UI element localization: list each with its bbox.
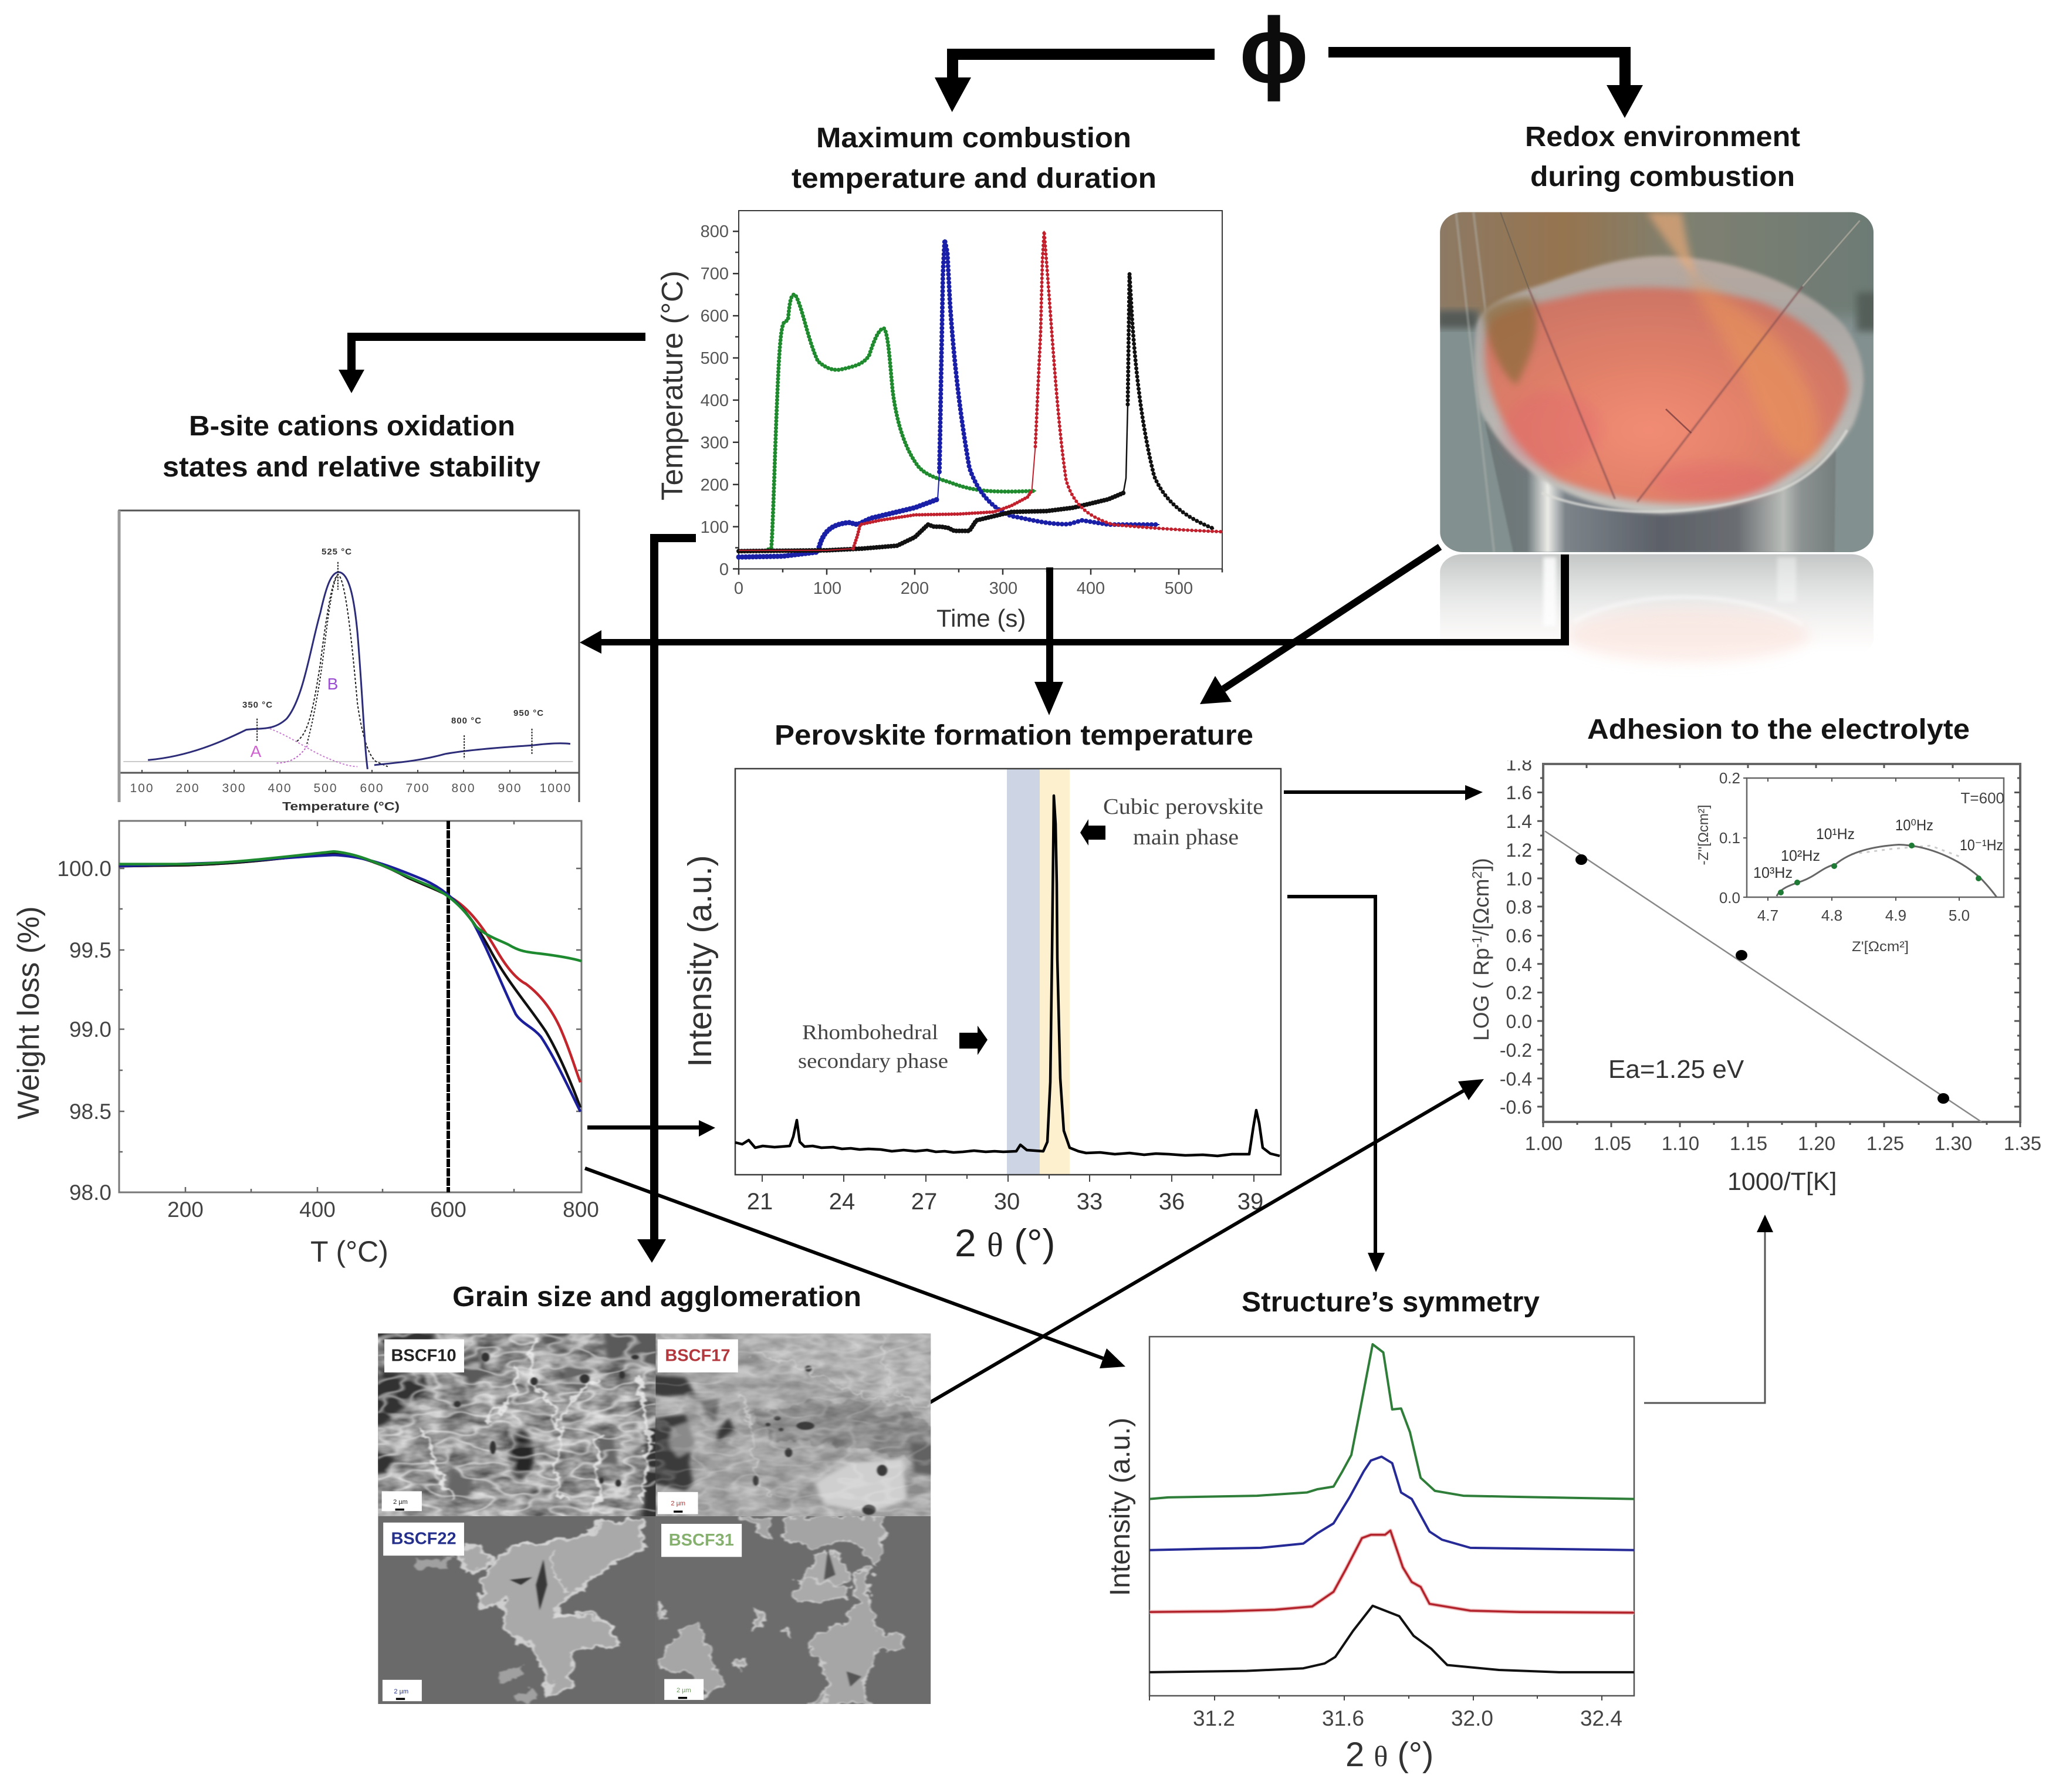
arrow: maximum temperature to perovskite formation: [1034, 567, 1063, 715]
peak labels: 950 °C: [513, 708, 544, 718]
heading: maximum combustion temperature and duration: [792, 123, 1156, 194]
x tick labels: 31.2: [1193, 1706, 1235, 1730]
tpr curves: [123, 562, 573, 769]
label: BSCF31: BSCF31: [669, 1531, 734, 1550]
y tick labels: 0.8: [1506, 897, 1532, 918]
micrograph: BSCF31: [655, 1516, 931, 1704]
x tick labels: 1.25: [1866, 1132, 1904, 1154]
arrow: maximum temperature to b-site cations: [339, 333, 645, 393]
inset x tick labels: 5.0: [1949, 907, 1970, 924]
x axis tick labels: 100: [813, 579, 841, 598]
impedance arc: [1777, 844, 1997, 897]
chart: arrhenius plot: [1469, 748, 2041, 1196]
heading: adhesion to the electrolyte: Adhesion to the electrolyte: [1587, 714, 1970, 745]
frequency labels: [1753, 816, 2003, 881]
micrograph: BSCF22: [378, 1516, 655, 1704]
label: BSCF22: [383, 1523, 464, 1556]
tpr tick labels: 500: [313, 782, 338, 795]
y tick labels: 0.6: [1506, 925, 1532, 946]
micrograph: BSCF17: [652, 1330, 936, 1516]
tpr tick labels: 1000: [540, 782, 572, 795]
x tick labels: 1.35: [2004, 1132, 2041, 1154]
heading: b-site cations: [163, 411, 540, 483]
frequency points: [1778, 843, 1981, 895]
x tick labels: 800: [563, 1198, 599, 1222]
x tick labels: 24: [829, 1189, 855, 1215]
flame tip: [1646, 212, 1697, 280]
y tick labels: 1.6: [1506, 782, 1532, 803]
x tick labels: 39: [1237, 1189, 1263, 1215]
rhombohedral band: [1007, 769, 1040, 1175]
y tick labels: 1.4: [1506, 811, 1532, 832]
y axis tick labels: [701, 222, 729, 579]
inset y tick labels: 0.0: [1719, 889, 1740, 907]
callout: rhombohedral secondary phase: [798, 1020, 948, 1073]
600 °C dashed marker: [447, 821, 450, 1192]
flame: [1688, 275, 1818, 460]
y axis title: /[Ωcm: [1469, 879, 1493, 936]
y tick labels: 99.0: [69, 1017, 111, 1042]
tpr tick labels: 100: [130, 782, 154, 795]
y axis title: -1: [1469, 936, 1484, 948]
y tick labels: [57, 857, 111, 1205]
label: BSCF22: BSCF22: [391, 1530, 456, 1548]
x tick labels: 1.05: [1594, 1132, 1631, 1154]
scale bar: BSCF17: [658, 1492, 698, 1514]
inset x tick labels: 4.7: [1757, 907, 1778, 924]
y tick labels: -0.2: [1500, 1040, 1532, 1061]
scale bar: BSCF31: 2 µm: [677, 1687, 691, 1694]
arrow: perovskite to adhesion: [1284, 785, 1483, 800]
y tick labels: 0.0: [1506, 1011, 1532, 1032]
x axis tick labels: [734, 579, 1193, 598]
y tick labels: 98.0: [69, 1181, 111, 1205]
pink lower melt tone: [1504, 391, 1599, 469]
panel: sem micrographs: [371, 1330, 936, 1704]
x axis tick labels: 200: [901, 579, 929, 598]
fit line: [1545, 831, 1981, 1122]
heading: maximum combustion temperature and duration: Maximum combustion: [816, 123, 1131, 154]
tpr tick labels: 300: [222, 782, 246, 795]
y axis tick labels: 800: [701, 222, 729, 241]
pink lower melt tone right: [1653, 463, 1774, 499]
peak labels: [242, 547, 544, 726]
inset x axis title: Z'[Ωcm²]: [1852, 939, 1909, 955]
frequency labels: 10⁻¹Hz: [1960, 836, 2003, 854]
photo: combustion in a steel cup: [1428, 200, 1885, 552]
combustion curves: [739, 231, 1223, 557]
scale bar: BSCF22: [383, 1680, 422, 1701]
x tick labels: 32.4: [1580, 1706, 1622, 1730]
frequency labels: 10⁰Hz: [1895, 816, 1933, 834]
tpr tick labels: 700: [405, 782, 430, 795]
tpr tick labels: 600: [360, 782, 384, 795]
y axis tick labels: 700: [701, 265, 729, 283]
tpr tick labels: 900: [498, 782, 522, 795]
cubic band: [1040, 769, 1070, 1175]
right wire top: [1803, 221, 1860, 286]
arrow: weight loss to perovskite: [587, 1120, 715, 1137]
cup body: [1484, 421, 1836, 552]
frequency labels: 10³Hz: [1753, 864, 1793, 881]
tpr tick labels: 200: [175, 782, 200, 795]
y tick labels: 100.0: [57, 857, 111, 881]
y axis tick labels: 0: [719, 560, 729, 579]
label: BSCF10: BSCF10: [391, 1346, 456, 1365]
y tick labels: -0.4: [1500, 1069, 1532, 1090]
peak letter A: A: [251, 742, 262, 760]
y axis title: Intensity (a.u.): [1105, 1418, 1136, 1596]
y tick labels: 1.0: [1506, 868, 1532, 890]
arrow: phi to maximum combustion temperature: [935, 49, 1215, 112]
scale bar: BSCF31: [664, 1679, 704, 1700]
x axis title: T (°C): [310, 1235, 388, 1268]
callout: rhombohedral secondary phase: secondary phase: [798, 1049, 948, 1073]
y tick labels: 98.5: [69, 1100, 111, 1124]
heading: maximum combustion temperature and duration: temperature and duration: [792, 163, 1156, 194]
inset y tick labels: 0.2: [1719, 769, 1740, 787]
xrd pattern: [735, 796, 1280, 1156]
callout: cubic perovskite: main phase: [1133, 825, 1239, 850]
heading: grain size and agglomeration: Grain size and agglomeration: [452, 1282, 861, 1313]
y axis title: ]): [1469, 858, 1493, 871]
inset x tick labels: [1757, 907, 1970, 924]
heading: b-site cations: B-site cations oxidation: [189, 411, 515, 442]
arrow: phi to redox environment: [1328, 47, 1643, 118]
x axis tick labels: 0: [734, 579, 743, 598]
temperature note: T=600: [1961, 789, 2004, 807]
y axis title: Temperature (°C): [655, 271, 689, 501]
heading: b-site cations: states and relative stability: [163, 452, 540, 483]
x tick labels: 600: [430, 1198, 466, 1222]
label: BSCF10: [384, 1340, 464, 1372]
y axis title: Weight loss (%): [12, 906, 46, 1120]
cup rim: [1475, 256, 1864, 514]
x tick labels: 36: [1159, 1189, 1185, 1215]
arrow: rhombohedral phase marker: [959, 1026, 988, 1055]
inset: impedance nyquist plot: [1696, 769, 2004, 955]
y tick labels: 0.4: [1506, 954, 1532, 975]
chart: xrd peak structure symmetry: [1105, 1337, 1634, 1774]
diffraction peaks: [1149, 1344, 1634, 1672]
arrow: redox environment to b-site cations: [580, 554, 1569, 654]
callout: cubic perovskite: Cubic perovskite: [1103, 794, 1263, 819]
x tick labels: [1193, 1706, 1622, 1730]
scale bar: BSCF17: 2 µm: [671, 1500, 685, 1507]
x axis title: Time (s): [936, 604, 1026, 632]
inset y tick labels: 0.1: [1719, 829, 1740, 847]
label: BSCF17: [658, 1340, 738, 1372]
label: BSCF17: BSCF17: [665, 1346, 731, 1365]
data points: [1575, 854, 1949, 1104]
x tick labels: 200: [167, 1198, 204, 1222]
heading: redox environment during combustion: Redox environment: [1525, 121, 1800, 153]
heading: perovskite formation temperature: Perovskite formation temperature: [775, 720, 1253, 751]
x tick labels: 1.00: [1525, 1132, 1563, 1154]
tpr axis title: Temperature (°C): [282, 800, 400, 813]
frequency labels: 10¹Hz: [1816, 825, 1855, 843]
tpr tick labels: [130, 782, 572, 795]
thermocouple wires: [1500, 212, 1529, 289]
arrow: cubic phase marker: [1080, 819, 1105, 846]
x tick labels: 21: [747, 1189, 773, 1215]
inset y axis title: -Z''[Ωcm²]: [1696, 804, 1712, 865]
inset x tick labels: 4.9: [1885, 907, 1906, 924]
callout: cubic perovskite: [1103, 794, 1263, 850]
chart: temperature programmed reduction: [119, 510, 579, 813]
heading: structure's symmetry: Structure’s symmetry: [1242, 1287, 1540, 1318]
y axis tick labels: 300: [701, 434, 729, 452]
y tick labels: [1500, 782, 1532, 1118]
chart: weight loss vs temperature: [12, 821, 599, 1268]
chart: xrd perovskite formation: [681, 769, 1281, 1264]
arrow: structure symmetry to adhesion: [1644, 1215, 1773, 1403]
x axis tick labels: 300: [989, 579, 1017, 598]
scale bar: BSCF22: 2 µm: [394, 1688, 408, 1695]
arrow: grains to adhesion: [927, 1079, 1484, 1404]
heading: redox environment during combustion: during combustion: [1530, 161, 1795, 192]
x axis title: 1000/T[K]: [1727, 1168, 1837, 1196]
scale bar: BSCF10: 2 µm: [393, 1499, 408, 1506]
x axis tick labels: 400: [1077, 579, 1105, 598]
activation energy label: Ea=1.25 eV: [1608, 1055, 1744, 1084]
title symbol: phi: ϕ: [1239, 0, 1308, 102]
peak letter B: B: [327, 675, 338, 693]
x axis title: 2 θ (°): [1345, 1736, 1433, 1774]
chart: combustion temperature vs time: [655, 211, 1223, 632]
y tick labels: 1.2: [1506, 840, 1532, 861]
arrow: perovskite to structure symmetry: [1287, 895, 1385, 1272]
arrow: redox environment to perovskite formation: [1200, 547, 1440, 704]
weight loss curves: [119, 851, 581, 1112]
x tick labels: 31.6: [1322, 1706, 1364, 1730]
label: BSCF31: [661, 1524, 742, 1557]
x tick labels: 32.0: [1451, 1706, 1493, 1730]
x tick labels: 33: [1077, 1189, 1103, 1215]
x tick labels: 1.15: [1730, 1132, 1767, 1154]
x tick labels: [167, 1198, 599, 1222]
x tick labels: 1.30: [1935, 1132, 1972, 1154]
x tick labels: 27: [911, 1189, 937, 1215]
x tick labels: [1525, 1132, 2041, 1154]
x axis title: 2 θ (°): [955, 1221, 1056, 1264]
y axis tick labels: 100: [701, 518, 729, 537]
tpr tick labels: 400: [268, 782, 292, 795]
peak labels: 525 °C: [322, 547, 352, 557]
wires over melt: [1529, 286, 1803, 502]
frequency labels: 10²Hz: [1781, 847, 1820, 864]
y axis tick labels: 500: [701, 349, 729, 368]
inset y tick labels: [1719, 769, 1740, 907]
y axis tick labels: 200: [701, 476, 729, 495]
arrow: weight loss to structure symmetry: [585, 1168, 1125, 1368]
x tick labels: [747, 1189, 1263, 1215]
inset x tick labels: 4.8: [1821, 907, 1842, 924]
peak labels: 800 °C: [451, 716, 482, 726]
y axis title: Intensity (a.u.): [681, 855, 719, 1067]
tpr tick labels: 800: [451, 782, 476, 795]
x tick labels: 1.10: [1662, 1132, 1699, 1154]
y axis tick labels: 600: [701, 307, 729, 326]
heading: redox environment during combustion: [1525, 121, 1800, 192]
y tick labels: 99.5: [69, 938, 111, 962]
y axis tick labels: 400: [701, 391, 729, 410]
x tick labels: 1.20: [1798, 1132, 1835, 1154]
molten surface: [1485, 288, 1849, 503]
x tick labels: 30: [994, 1189, 1020, 1215]
brown residue on the spout: [1483, 297, 1537, 385]
scale bar: BSCF10: [382, 1491, 422, 1511]
y axis title: LOG ( Rp: [1469, 948, 1493, 1041]
callout: rhombohedral secondary phase: Rhombohedral: [802, 1020, 938, 1044]
x tick labels: 400: [299, 1198, 336, 1222]
y axis title: 2: [1469, 871, 1484, 879]
y tick labels: -0.6: [1500, 1097, 1532, 1118]
photo reflection: [1440, 554, 1874, 662]
arrow: maximum temperature to grain size: [637, 534, 696, 1263]
peak labels: 350 °C: [242, 700, 273, 710]
micrograph: BSCF10: [371, 1330, 660, 1521]
x axis tick labels: 500: [1165, 579, 1193, 598]
clipped top label: 1.8: [1506, 753, 1532, 775]
y tick labels: 0.2: [1506, 982, 1532, 1003]
